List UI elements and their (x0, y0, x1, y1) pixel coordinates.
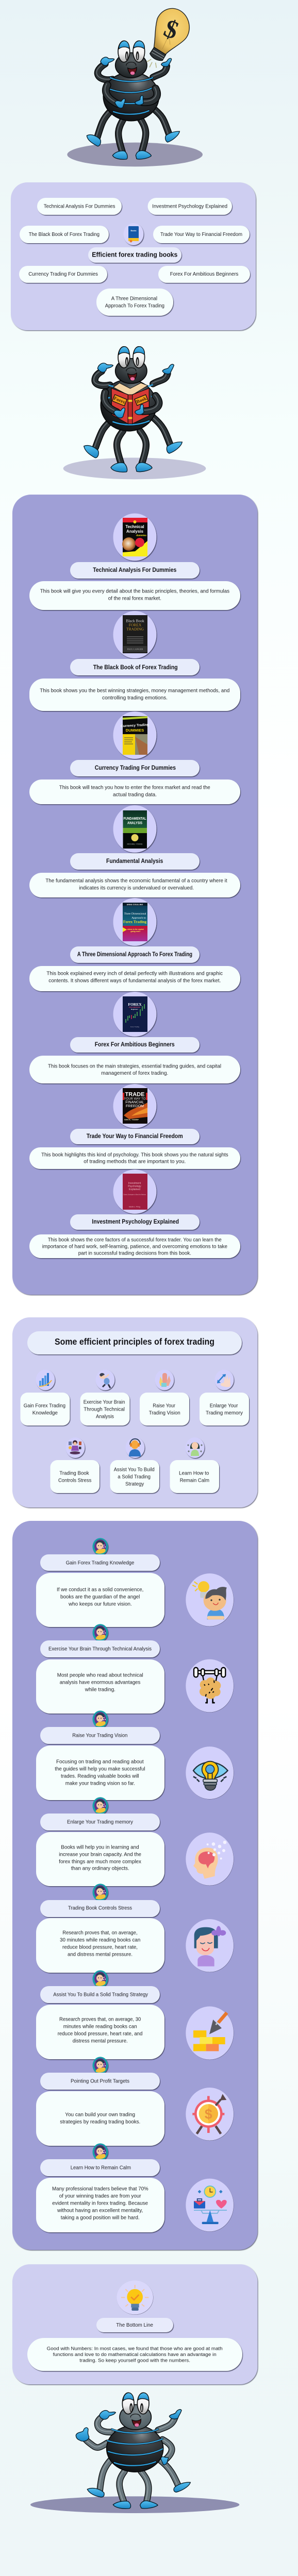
pill: A Three Dimensional Approach To Forex Trading (96, 289, 173, 316)
book cover circle 7: VAN K. THARP (124, 1118, 139, 1121)
step title: Learn How to Remain Calm (71, 2165, 131, 2171)
step body: 30 minutes while reading books can (60, 1937, 140, 1943)
step 5: Trading Book Controls Stress (36, 1884, 234, 1973)
step title: Exercise Your Brain Through Technical Analysis (48, 1646, 152, 1652)
description 8 (29, 1234, 240, 1258)
step 2: Exercise Your Brain Through Technical Analysis (36, 1624, 234, 1714)
description 5: contents. It shows different ways of fundamental analysis of the forex market. (48, 978, 221, 984)
step title: Pointing Out Profit Targets (71, 2078, 129, 2084)
step 6: Assist You To Build a Solid Trading Strategy (36, 1970, 234, 2060)
description 7 (29, 1147, 240, 1169)
title: Currency Trading For Dummies (70, 760, 200, 776)
step body: increase your brain capacity. And the (59, 1852, 141, 1858)
icon: woman with headset (126, 1437, 144, 1458)
book 4: Fundamental Analysis (29, 805, 240, 897)
step body: Many professional traders believe that 70% (52, 2185, 148, 2192)
step title: Gain Forex Trading Knowledge (66, 1560, 135, 1566)
card text: Remain Calm (180, 1478, 209, 1484)
book cover circle 5: Three Dimensional (124, 912, 146, 916)
step title: Trading Book Controls Stress (68, 1905, 132, 1911)
card text: Trading memory (206, 1410, 243, 1416)
book cover circle 6: FOR AMBITIOUS (129, 1006, 140, 1008)
book cover circle 2: PAUL LANGER (127, 648, 143, 650)
description 8: part in successful trading decisions from this book. (78, 1250, 191, 1256)
book 7: Trade Your Way to Financial Freedom (29, 1084, 240, 1169)
step body: distress mental pressure. (73, 2038, 128, 2044)
principle: Raise Your Trading Vision (140, 1369, 189, 1426)
step title (40, 1727, 160, 1744)
step body: who keeps our future vision. (68, 1601, 132, 1607)
step body: trades. Reading valuable books will (61, 1773, 139, 1780)
step 7: Pointing Out Profit Targets (36, 2057, 234, 2146)
icon: pinch hand with arrow (214, 1369, 234, 1390)
illustration: target with dollar coin and arrow (186, 2088, 234, 2141)
principle: Gain Forex Trading Knowledge (21, 1369, 70, 1426)
title: Trade Your Way to Financial Freedom: Trade Your Way to Financial Freedom (87, 1133, 183, 1140)
description 6 (29, 1056, 240, 1083)
book cover circle 5: Forex Trading (123, 919, 146, 924)
step 4: Enlarge Your Trading memory (36, 1797, 234, 1886)
book 1: Technical Analysis For Dummies (29, 513, 240, 610)
heading: Efficient forex trading books: Efficient forex trading books (92, 251, 177, 259)
card text (80, 1393, 130, 1426)
description 3: This book will teach you how to enter the forex market and read the (59, 784, 210, 790)
title: Fundamental Analysis (70, 853, 200, 870)
step title (40, 1900, 160, 1917)
panel: the bottom line (12, 2264, 258, 2384)
step body: strategies by reading trading books. (60, 2119, 140, 2125)
book 5: A Three Dimensional Approach To Forex Trading (29, 898, 240, 991)
heading: Efficient forex trading books (88, 247, 181, 263)
heading: Some efficient principles of forex trading (27, 1331, 242, 1354)
principle: Trading Book Controls Stress (51, 1437, 100, 1493)
step body: than any ordinary objects. (71, 1865, 129, 1871)
book cover circle 1: Analysis (126, 529, 144, 534)
step body: Research proves that, on average, (62, 1930, 138, 1936)
book cover circle 6 (113, 992, 157, 1037)
book cover circle 4: ANALYSIS (127, 820, 142, 825)
card text: Trading Book (59, 1470, 89, 1477)
title: Technical Analysis For Dummies: Technical Analysis For Dummies (93, 567, 176, 573)
card text: Trading Vision (149, 1410, 180, 1416)
book cover circle 7: YOUR WAY TO (124, 1097, 146, 1100)
illustration: eye and light bulb (186, 1747, 234, 1799)
card text: Through Technical (84, 1406, 125, 1413)
principle: Assist You To Build a Solid Trading Strategy (110, 1437, 159, 1493)
heading: The Bottom Line (96, 2318, 173, 2332)
step title (40, 2073, 160, 2090)
description 2 (29, 679, 240, 711)
icon: avatar badge (93, 1884, 108, 1901)
step body: without having an excellent mentality, (57, 2207, 143, 2213)
mascot: spider reading a forex book: Forex (113, 396, 126, 405)
icon: calm woman (186, 1437, 204, 1458)
panel: principle explanations (12, 1521, 258, 2250)
description 4: indicates its currency is undervalued or overvalued. (79, 885, 194, 891)
pill: Currency Trading For Dummies (19, 266, 107, 283)
text block: good with numbers: trading. So keep yourself good with the numbers. (79, 2358, 190, 2364)
book cover circle 5 (113, 898, 157, 946)
title: Forex For Ambitious Beginners: Forex For Ambitious Beginners (95, 1042, 175, 1048)
book 3: Currency Trading For Dummies (29, 711, 240, 804)
title: Currency Trading For Dummies: Currency Trading For Dummies (95, 765, 176, 771)
step title: Raise Your Trading Vision (72, 1732, 127, 1738)
book cover circle 1: Technical (125, 524, 144, 529)
description 6: This book focuses on the main strategies, essential trading guides, and capital (48, 1063, 221, 1070)
book cover circle 7: TRADE (125, 1091, 144, 1097)
icon: avatar badge (93, 2057, 108, 2074)
step 1: Gain Forex Trading Knowledge (36, 1538, 234, 1627)
illustration: target with dollar coin and arrow: $ (205, 2106, 212, 2122)
icon: raised hands (155, 1369, 174, 1390)
step body: of your winning trades are from your (59, 2193, 141, 2199)
title: The Black Book of Forex Trading: The Black Book of Forex Trading (93, 665, 178, 671)
pill: Investment Psychology Explained (147, 198, 232, 215)
book cover circle 6: Beginners (131, 1008, 138, 1010)
step body: books are the guardian of the angel (60, 1594, 140, 1600)
description 1: of the real forex market. (108, 596, 161, 602)
title: Investment Psychology Explained (70, 1214, 200, 1230)
icon: book: Books (131, 230, 136, 232)
book cover circle 7: FINANCIAL (125, 1100, 144, 1105)
icon: book (124, 223, 143, 245)
pill: Forex For Ambitious Beginners (158, 266, 250, 283)
description 2: This book shows you the best winning strategies, money management methods, and (40, 687, 229, 693)
icon: person stretching (96, 1369, 114, 1390)
illustration: trowel and bricks (186, 2006, 234, 2060)
mascot: spider with money light bulb: $ (160, 13, 183, 45)
title: A Three Dimensional Approach To Forex Trading: A Three Dimensional Approach To Forex Trading (77, 952, 192, 958)
description 4: The fundamental analysis shows the economic fundamental of a country where it (45, 878, 227, 884)
card text: Controls Stress (58, 1478, 91, 1484)
book cover circle 2 (113, 611, 157, 658)
description 7: of trading methods that are important to you. (84, 1158, 186, 1164)
description 4 (29, 873, 240, 897)
step body (36, 2178, 164, 2232)
book cover circle 4: FUNDAMENTAL (124, 816, 146, 821)
book cover circle 4 (113, 805, 157, 853)
step title (40, 1986, 160, 2003)
title: Trade Your Way to Financial Freedom (70, 1129, 200, 1144)
description 8: This book shows the core factors of a successful forex trader. You can learn the (48, 1236, 222, 1243)
panel: book details (12, 495, 258, 1295)
book cover circle 5: where is the market (127, 928, 144, 930)
description 3 (29, 779, 240, 804)
book 2: The Black Book of Forex Trading (29, 611, 240, 711)
step body: while trading. (85, 1687, 115, 1693)
step title: Enlarge Your Trading memory (67, 1819, 134, 1825)
step body: Books will help you in learning and (61, 1844, 139, 1851)
book cover circle 8: Investment (128, 1182, 141, 1185)
title: The Black Book of Forex Trading (70, 659, 200, 675)
card text: Assist You To Build (114, 1466, 155, 1472)
description 5 (29, 966, 240, 991)
step body: and distress mental pressure. (68, 1952, 133, 1958)
principle: Enlarge Your Trading memory (200, 1369, 249, 1426)
step body (36, 1573, 164, 1627)
step body: reduce blood pressure, heart rate, and (58, 2031, 143, 2037)
step body: Research proves that, on average, 30 (59, 2016, 141, 2023)
step body: forex things are much more complex (59, 1859, 142, 1865)
book cover circle 8: Psychology (128, 1185, 141, 1188)
pill: Currency Trading For Dummies: Currency Trading For Dummies (28, 271, 98, 277)
card text: Gain Forex Trading (24, 1402, 65, 1409)
panel: some efficient principles of forex trading (12, 1317, 258, 1507)
book cover circle 7: FREEDOM (126, 1105, 144, 1108)
step body: make your trading vision so far. (65, 1781, 135, 1787)
text block: good with numbers (27, 2338, 242, 2371)
icon: avatar badge (93, 1624, 108, 1641)
title: Forex For Ambitious Beginners (70, 1037, 200, 1053)
card text (51, 1460, 100, 1493)
book cover circle 3: Currency Trading (121, 723, 149, 728)
pill: Technical Analysis For Dummies: Technical Analysis For Dummies (44, 203, 115, 209)
step body (36, 1745, 164, 1800)
step body: If we conduct it as a solid convenience, (57, 1587, 143, 1593)
title: Investment Psychology Explained: Investment Psychology Explained (92, 1219, 179, 1225)
step body: Focusing on trading and reading about (56, 1759, 144, 1765)
heading: The Bottom Line: The Bottom Line (116, 2322, 153, 2328)
card text (110, 1460, 159, 1493)
title: Fundamental Analysis: Fundamental Analysis (106, 858, 163, 865)
icon: avatar badge (93, 1538, 108, 1555)
principle: Exercise Your Brain Through Technical Analysis (80, 1369, 130, 1426)
book cover circle 2: TRADING (126, 626, 144, 632)
text block: good with numbers: functions and love to do mathematical calculations have an advantage in (53, 2352, 217, 2358)
step body: analysis have enormous advantages (60, 1680, 140, 1686)
icon: avatar badge (93, 1710, 108, 1728)
illustration: calm woman with lotus (186, 1919, 234, 1972)
card text: Raise Your (153, 1402, 175, 1409)
step body: evident mentality in forex trading. Because (52, 2200, 148, 2206)
description 3: actual trading data. (113, 791, 157, 798)
card text: Exercise Your Brain (84, 1399, 125, 1405)
card text (140, 1393, 189, 1426)
card text: Enlarge Your (210, 1402, 238, 1409)
step title (40, 1640, 160, 1657)
pill: Investment Psychology Explained: Investment Psychology Explained (152, 203, 227, 209)
icon: avatar badge (93, 2143, 108, 2161)
panel: efficient forex trading books overview (11, 182, 256, 330)
book cover circle 4: MICHAEL YOUNG (127, 843, 143, 845)
step title (40, 1554, 160, 1571)
card text: Knowledge (32, 1410, 58, 1416)
step body: reduce blood pressure, heart rate, (62, 1944, 138, 1951)
book cover circle 6: Forex Trading (130, 1026, 140, 1028)
description 1: This book will give you every detail about the basic principles, theories, and formulas (40, 588, 229, 595)
card text: a Solid Trading (118, 1473, 151, 1480)
icon: avatar badge (93, 1970, 108, 1988)
description 2: controlling trading emotions. (102, 694, 168, 701)
book cover circle 1 (113, 513, 157, 561)
pill: The Black Book of Forex Trading: The Black Book of Forex Trading (29, 231, 100, 238)
book cover circle 6: FOREX (128, 1002, 142, 1007)
step 8: Learn How to Remain Calm (36, 2143, 234, 2232)
description 1 (29, 581, 240, 610)
book cover circle 8: Explained (129, 1188, 140, 1191)
mascot: spider reading a forex book: Book (136, 396, 148, 405)
step body: taking a good position will be hard. (61, 2214, 140, 2221)
step body (36, 1832, 164, 1886)
step body: the guides will help you make successful (55, 1766, 145, 1772)
title: A Three Dimensional Approach To Forex Trading (70, 946, 200, 963)
step body: You can build your own trading (65, 2111, 135, 2117)
icon: light bulb with check mark (117, 2280, 153, 2314)
card text: Strategy (125, 1481, 144, 1487)
pill: A Three Dimensional Approach To Forex Trading: Approach To Forex Trading (105, 303, 164, 309)
text block: good with numbers: Good with Numbers: In most cases, we found that those who are good at math (47, 2346, 223, 2351)
step title (40, 1814, 160, 1831)
pill: The Black Book of Forex Trading (20, 226, 109, 243)
pill: A Three Dimensional Approach To Forex Trading: A Three Dimensional (111, 296, 157, 302)
book cover circle 1: dummies (136, 534, 146, 537)
illustration: brain lifting dumbbell (186, 1659, 234, 1712)
icon: woman meditating (66, 1437, 85, 1458)
step body: Most people who read about technical (57, 1672, 143, 1679)
card text: Learn How to (179, 1470, 209, 1477)
icon: avatar badge (93, 1797, 108, 1815)
step 3: Raise Your Trading Vision (36, 1710, 234, 1800)
heading: Some efficient principles of forex trading: Some efficient principles of forex trading (55, 1336, 214, 1347)
pill: Trade Your Way to Financial Freedom: Trade Your Way to Financial Freedom (160, 231, 242, 238)
step body (36, 2091, 164, 2146)
book 8: Investment Psychology Explained (29, 1170, 240, 1258)
mascot: spider with money light bulb (67, 8, 203, 166)
step body (36, 2005, 164, 2059)
title: Technical Analysis For Dummies (70, 562, 200, 579)
illustration: head with brain (186, 1833, 234, 1886)
book cover circle 3: DUMMIES (126, 728, 144, 733)
card text (21, 1393, 70, 1426)
description 6: management of forex trading. (101, 1070, 168, 1076)
book cover circle 2: Black Book (126, 618, 144, 623)
book cover circle 5: Approach to (131, 917, 146, 920)
step body: minutes while reading books can (63, 2024, 137, 2030)
step body (36, 1918, 164, 1973)
book cover circle 8 (113, 1170, 157, 1214)
book cover circle 7 (113, 1084, 157, 1128)
icon: rising bar chart (36, 1369, 55, 1390)
step title: Assist You To Build a Solid Trading Strategy (53, 1992, 148, 1998)
step body (36, 1659, 164, 1714)
description 8: importance of hard work, self-learning, patience, and overcoming emotions to take (42, 1244, 227, 1250)
book cover circle 2: FOREX (129, 622, 142, 628)
pill: Forex For Ambitious Beginners: Forex For Ambitious Beginners (170, 271, 238, 277)
card text (170, 1460, 219, 1493)
book cover circle 3 (113, 711, 157, 759)
principle: Learn How to Remain Calm (170, 1437, 219, 1493)
description 5: This book explained every inch of detail perfectly with illustrations and graphic (46, 971, 223, 977)
mascot: spider reading a forex book (63, 347, 206, 479)
description 7: This book highlights this kind of psychology. This book shows you the natural sights (41, 1152, 228, 1158)
book cover circle 5: ANNA COULLING (127, 904, 143, 906)
card text: Analysis (96, 1414, 114, 1420)
pill: Trade Your Way to Financial Freedom (153, 226, 250, 243)
pill: Technical Analysis For Dummies (37, 198, 122, 215)
step title (40, 2159, 160, 2176)
card text (200, 1393, 249, 1426)
illustration: work life balance scale (186, 2179, 234, 2231)
mascot: grey spider pointing (30, 2393, 239, 2513)
book cover circle 8: Martin J. Pring (129, 1206, 140, 1208)
book 6: Forex For Ambitious Beginners (29, 992, 240, 1083)
book cover circle 5: going next? (130, 930, 141, 933)
book cover circle 8: Classic Strategies to Beat the Markets (123, 1193, 146, 1195)
illustration: boy with light bulb (186, 1573, 234, 1626)
